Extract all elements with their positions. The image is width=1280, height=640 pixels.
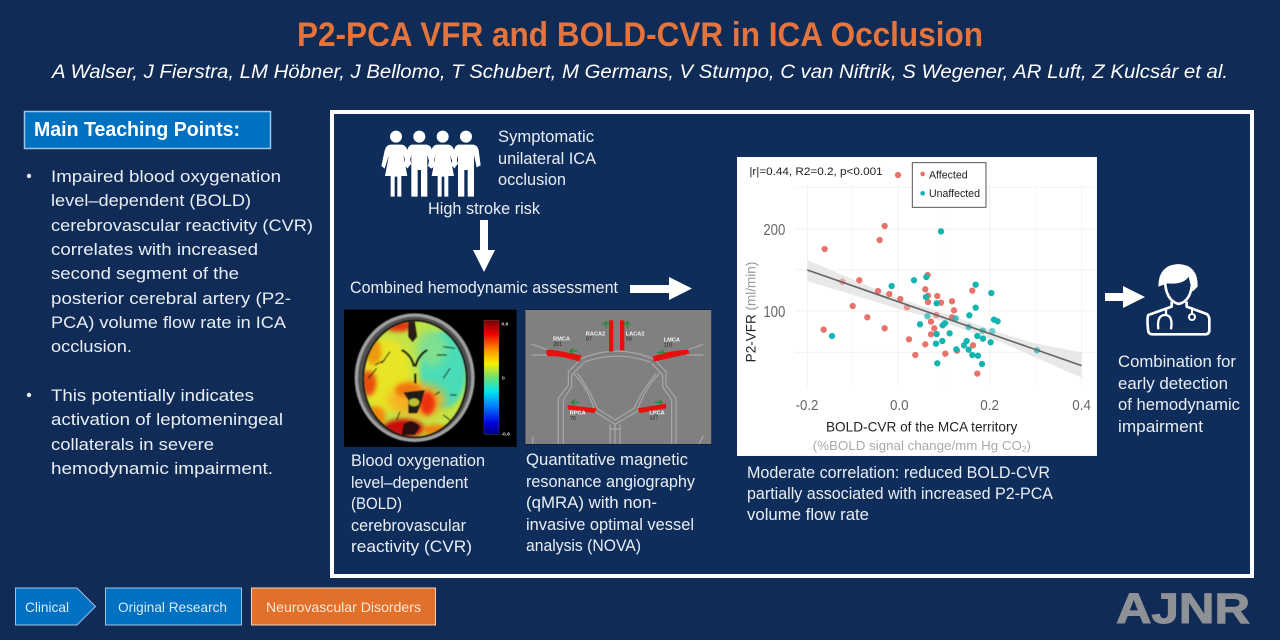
legend: [912, 163, 986, 207]
image: qMRA NOVA vessel diagram: LPCA: [649, 411, 665, 417]
image: qMRA NOVA vessel diagram: 201: [553, 342, 562, 348]
text: symptomatic occlusion: Symptomatic: [498, 127, 594, 146]
regression line: [807, 270, 1082, 366]
text block: teaching point 1: second segment of the: [51, 264, 239, 283]
icon: group of patients: [381, 131, 481, 197]
text block: teaching point 1: cerebrovascular reactivity (CVR): [51, 216, 313, 235]
text block: teaching point 2: [27, 386, 283, 478]
y axis ticks: 200: [763, 222, 786, 239]
text block: teaching point 2: This potentially indicates: [51, 386, 254, 405]
caption: combination for early detection: Combination for: [1118, 352, 1236, 371]
color scale bar: -0.6: [501, 431, 510, 437]
tag: clinical: [16, 588, 96, 625]
statistics: |r|=0.44, R2=0.2, p<0.001: [749, 166, 883, 178]
text block: teaching point 1: occlusion.: [51, 337, 132, 356]
image: qMRA NOVA vessel diagram: 137: [649, 416, 658, 422]
text: high stroke risk: High stroke risk: [428, 199, 540, 218]
legend: Affected: [929, 170, 968, 182]
image: qMRA NOVA vessel diagram: [525, 310, 712, 444]
unaffected points: [829, 228, 1040, 367]
caption: moderate correlation: [747, 463, 1054, 524]
caption: qMRA: analysis (NOVA): [526, 536, 641, 555]
caption: qMRA: Quantitative magnetic: [526, 450, 688, 469]
text: symptomatic occlusion: occlusion: [498, 170, 566, 189]
caption: qMRA: (qMRA) with non-: [526, 493, 657, 512]
arrow: to clinician: [1105, 286, 1145, 308]
caption: moderate correlation: volume flow rate: [747, 505, 869, 524]
caption: BOLD-CVR: reactivity (CVR): [351, 537, 472, 556]
caption: combination for early detection: of hemodynamic: [1118, 395, 1240, 414]
arrow: right: [630, 277, 692, 300]
caption: moderate correlation: partially associated with increased P2-PCA: [747, 484, 1054, 503]
image: qMRA NOVA vessel diagram: LMCA: [664, 337, 680, 343]
text block: teaching point 1: level–dependent (BOLD): [51, 191, 251, 210]
affected points: [820, 172, 980, 377]
caption: combination for early detection: [1118, 352, 1240, 436]
y axis title: P2-VFR (ml/min): [743, 262, 759, 362]
image: qMRA NOVA vessel diagram: LACA2: [626, 332, 645, 338]
tag: clinical: Clinical: [25, 599, 69, 615]
image: qMRA NOVA vessel diagram: 76: [570, 416, 576, 422]
authors: A Walser, J Fierstra, LM Höbner, J Bellomo, T Schubert, M Germans, V Stumpo, C van Niftrik, S Wegener, AR Luft, Z Kulcsár et al.: [51, 62, 1228, 83]
image: qMRA NOVA vessel diagram: 56: [626, 337, 632, 343]
x axis units: (%BOLD signal change/mm Hg CO: [813, 438, 1016, 453]
text block: teaching point 2: collaterals in severe: [51, 435, 214, 454]
x axis ticks: 0.2: [980, 397, 999, 414]
x axis title: BOLD-CVR of the MCA territory: [826, 419, 1017, 435]
text block: teaching point 1: correlates with increased: [51, 240, 258, 259]
caption: qMRA: [526, 450, 695, 555]
caption: moderate correlation: Moderate correlation: reduced BOLD-CVR: [747, 463, 1050, 482]
tag: neurovascular disorders: Neurovascular Disorders: [266, 599, 421, 615]
image: qMRA NOVA vessel diagram: RACA2: [586, 332, 605, 338]
text: combined hemodynamic assessment: Combined hemodynamic assessment: [350, 278, 618, 297]
image: qMRA NOVA vessel diagram: RPCA: [570, 411, 586, 417]
image: BOLD-CVR brain map: [344, 310, 517, 447]
title: P2-PCA VFR and BOLD-CVR in ICA Occlusion: [297, 16, 983, 54]
caption: BOLD-CVR: [351, 451, 485, 556]
heading: main teaching points: Main Teaching Points:: [34, 119, 240, 141]
caption: combination for early detection: early detection: [1118, 374, 1228, 393]
text block: teaching point 1: Impaired blood oxygenation: [51, 167, 281, 186]
chart: scatter plot of P2-VFR vs BOLD-CVR: [737, 157, 1097, 456]
image: qMRA NOVA vessel diagram: 110: [664, 343, 672, 349]
caption: BOLD-CVR: level–dependent: [351, 473, 468, 492]
confidence band: [807, 260, 1082, 378]
legend: Unaffected: [929, 188, 980, 200]
tag: neurovascular disorders: [252, 588, 436, 625]
y axis ticks: 100: [763, 304, 786, 321]
x axis ticks: 0.0: [890, 397, 909, 414]
text block: teaching point 1: posterior cerebral artery (P2-: [51, 289, 291, 308]
caption: BOLD-CVR: Blood oxygenation: [351, 451, 485, 470]
text block: teaching point 2: hemodynamic impairment.: [51, 459, 273, 478]
x axis units: 2: [1022, 445, 1027, 454]
x axis units: ): [1027, 438, 1031, 453]
image: qMRA NOVA vessel diagram: RMCA: [553, 337, 570, 343]
caption: BOLD-CVR: (BOLD): [351, 494, 402, 513]
text block: teaching point 1: [27, 167, 313, 356]
color scale bar: 0: [502, 376, 505, 382]
color scale bar: [484, 320, 510, 437]
image: qMRA NOVA vessel diagram: 87: [586, 337, 592, 343]
caption: qMRA: resonance angiography: [526, 472, 695, 491]
tag: original research: [106, 588, 242, 625]
x axis ticks: -0.2: [796, 397, 818, 414]
x axis ticks: 0.4: [1072, 397, 1091, 414]
panel: study summary: [332, 112, 1252, 576]
heading: main teaching points: [24, 112, 270, 148]
y axis ticks: [763, 222, 786, 321]
color scale bar: 0.6: [501, 322, 508, 328]
x axis ticks: [796, 397, 1091, 414]
text block: teaching point 1: PCA) volume flow rate in ICA: [51, 313, 287, 332]
icon: clinician with stethoscope: [1147, 264, 1209, 334]
caption: combination for early detection: impairment: [1118, 417, 1203, 436]
text: symptomatic occlusion: [498, 127, 597, 189]
arrow: down: [473, 220, 495, 272]
caption: BOLD-CVR: cerebrovascular: [351, 516, 466, 535]
text: symptomatic occlusion: unilateral ICA: [498, 149, 597, 168]
logo: AJNR: AJNR: [1116, 585, 1250, 633]
caption: qMRA: invasive optimal vessel: [526, 515, 694, 534]
tag: original research: Original Research: [118, 599, 227, 615]
text block: teaching point 2: activation of leptomeningeal: [51, 410, 283, 429]
